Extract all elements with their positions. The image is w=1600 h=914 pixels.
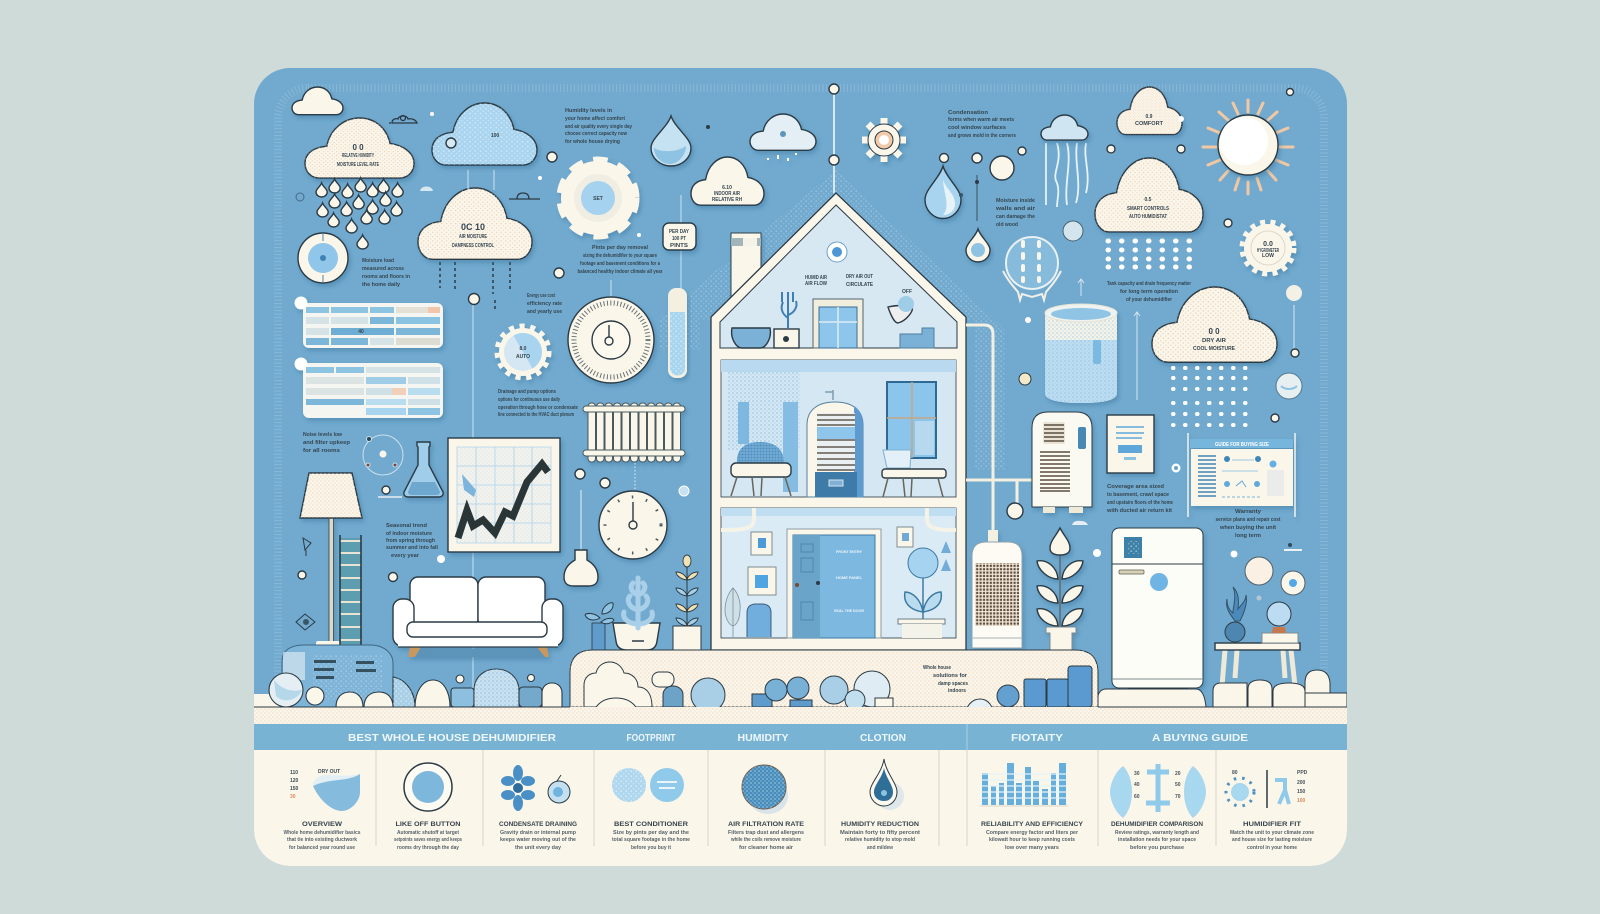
buying guide board: [1188, 433, 1295, 517]
icon: ring gauge faint: [363, 435, 403, 475]
text block: centre upper: Pints per day removal: [592, 245, 649, 251]
column: two circles: total square footage in the home: [612, 837, 690, 843]
column: bar chart: RELIABILITY AND EFFICIENCY: [981, 821, 1084, 828]
column: guide diagram: 60: [1134, 794, 1140, 800]
text block: mid left: Energy use cost: [527, 293, 555, 299]
text block: under small frame: and upstairs floors of the home: [1107, 500, 1173, 506]
ground strip with dots: [254, 707, 1347, 724]
cloud: blue with dots: 100: [491, 133, 499, 139]
column: water drop: [840, 759, 920, 851]
column: water drop: relative humidity to stop mold: [845, 837, 915, 843]
gear right with label: HYGROMETER: [1257, 248, 1279, 254]
label box small: PER DAY: [669, 229, 690, 235]
column: guide diagram: installation needs for your space: [1118, 837, 1196, 843]
attic room: [720, 205, 957, 348]
text block: above tank: Tank capacity and drain frequency matter: [1107, 281, 1191, 287]
scattered icons lower right: [1072, 521, 1305, 600]
gear outlined top centre: [862, 118, 906, 162]
text block: on cream ground: damp spaces: [938, 681, 968, 687]
ground floor room with door: FRONT ENTRY: [836, 549, 862, 554]
cloud: top right small with label: COMFORT: [1135, 121, 1163, 127]
label box small: [663, 223, 696, 250]
text block: under small frame: to basement, crawl space: [1107, 492, 1169, 498]
cloud: lower right with dots: 0 0: [1208, 327, 1220, 336]
lines and dots around clock: [575, 463, 689, 550]
panel: lower guide columns: [254, 750, 1347, 866]
column: final diagram: Match the unit to your climate zone: [1230, 830, 1314, 836]
clock wall: [599, 491, 667, 559]
small icons left column: [296, 486, 445, 630]
cloud: large middle right with dots: [1095, 158, 1203, 267]
text block: top of house right: Condensation: [948, 110, 988, 116]
pipe system to dehumidifier: [966, 325, 1032, 530]
text block: top of house right: cool window surfaces: [948, 125, 1006, 131]
cloud: rain left with label: 0 0: [352, 143, 364, 152]
gear small with label: AUTO: [516, 354, 530, 360]
cloud: centre small with label: 6.10: [722, 185, 732, 191]
cloud: central with hanging chains: [418, 188, 532, 312]
title band: [254, 724, 1347, 750]
column: guide diagram: 50: [1175, 782, 1181, 788]
gear small with label: 8.0: [520, 346, 527, 352]
buying guide board: GUIDE FOR BUYING SIZE: [1215, 442, 1270, 448]
text block: above radiator: line connected to the HVAC duct plenum: [498, 412, 574, 418]
text block: under board: Warranty: [1235, 509, 1261, 515]
column: overview: 110: [290, 770, 298, 776]
icon: lab flask: [404, 442, 443, 497]
column: overview: that tie into existing ductwork: [287, 837, 357, 843]
column: ring icon: setpoints saves energy and keeps: [394, 837, 462, 843]
text block: top of house right: and grows mold in the corners: [948, 133, 1016, 139]
text block: under small frame: with ducted air return kit: [1106, 508, 1172, 514]
column: final diagram: [1226, 770, 1314, 851]
base blobs right: [1098, 670, 1347, 707]
gear small with label: [498, 326, 549, 378]
text block: top of house right: [948, 110, 1016, 139]
text block: small right of house: can damage the: [996, 214, 1035, 220]
text block: small right of house: old wood: [996, 222, 1018, 228]
cloud: blue with dots: [432, 103, 537, 165]
column: water drop: HUMIDITY REDUCTION: [841, 821, 919, 828]
text block: small right of house: walls and air: [995, 206, 1035, 212]
text block: under board: long term: [1235, 533, 1262, 539]
column: final diagram: 80: [1232, 770, 1238, 776]
text block: beside chart: [386, 523, 439, 559]
text block: centre upper: sizing the dehumidifier to your square: [583, 253, 657, 259]
text block: under board: [1216, 509, 1281, 539]
column: final diagram: 200: [1297, 780, 1306, 786]
text block: beside dial: Moisture load: [362, 258, 394, 264]
column: ring icon: LIKE OFF BUTTON: [396, 821, 461, 828]
text block: above radiator: [498, 389, 578, 418]
dots and balls right: [1019, 285, 1302, 422]
column: final diagram: and house size for lasting moisture: [1232, 837, 1312, 843]
text block: beside dial: measured across: [362, 266, 404, 272]
column: two circles: before you buy it: [631, 845, 671, 851]
column: two circles: [612, 768, 690, 851]
column: guide diagram: DEHUMIDIFIER COMPARISON: [1111, 821, 1203, 828]
text block: top left notes: and air quality every single day: [565, 124, 632, 130]
text block: top left notes: your home affect comfort: [565, 116, 625, 122]
text block: under small frame: [1106, 484, 1173, 514]
column: overview: OVERVIEW: [302, 821, 343, 828]
plant: white leaves: [1037, 528, 1083, 650]
cloud: top right small with label: [1117, 87, 1182, 135]
text block: above tank: [1107, 281, 1191, 303]
label box small: 100 PT: [672, 236, 686, 242]
table: comparison one: [294, 296, 443, 348]
column: ring icon: [394, 763, 462, 851]
column: guide diagram: 40: [1134, 782, 1140, 788]
column: bar chart: Compare energy factor and liters per: [986, 830, 1078, 836]
icon: test tube: [668, 288, 687, 378]
column: flower and ball: CONDENSATE DRAINING: [499, 821, 577, 828]
cloud: small with wavy rain: [1041, 115, 1088, 207]
attic room: HUMID AIR: [805, 275, 827, 281]
plant: potted coral: [613, 578, 660, 650]
dial: circular meter left: [298, 233, 348, 283]
icon: sun: [1203, 100, 1293, 194]
ground floor room with door: [721, 508, 956, 638]
cloud: centre small with label: [691, 157, 764, 205]
water tank cylinder: [1045, 304, 1117, 403]
text block: top left notes: choose correct capacity now: [565, 131, 627, 137]
gear large with blue hub: SET: [593, 196, 603, 202]
sofa: [393, 577, 563, 657]
attic room: AIR FLOW: [805, 281, 827, 287]
text block: under small frame: Coverage area sized: [1107, 484, 1164, 490]
column: flower and ball: the unit every day: [515, 845, 561, 851]
house: whole cutaway: [711, 193, 966, 650]
cloud: central with hanging chains: DAMPNESS CONTROL: [452, 243, 494, 249]
table with vase and globe: [1215, 587, 1300, 686]
ground floor room with door: SEAL THE DOOR: [834, 608, 864, 613]
column: guide diagram: 70: [1175, 794, 1181, 800]
middle room with dehumidifier: [721, 360, 956, 497]
cloud: small blue-white top: [750, 114, 816, 161]
text block: beside dial: rooms and floors in: [362, 274, 410, 280]
cloud: large middle right with dots: AUTO HUMIDISTAT: [1129, 214, 1167, 220]
text block: top left notes: for whole house drying: [565, 139, 620, 145]
cloud: large middle right with dots: SMART CONTROLS: [1127, 206, 1170, 212]
column: water drop: and mildew: [867, 845, 893, 851]
text block: beside chart: Seasonal trend: [386, 523, 427, 529]
title band: A BUYING GUIDE: [1152, 732, 1248, 744]
text block: beside chart: every year: [391, 553, 419, 559]
column: overview: 150: [290, 786, 299, 792]
text block: beside dial: [362, 258, 410, 288]
column: final diagram: PPD: [1297, 770, 1308, 776]
cloud: centre small with label: INDOOR AIR: [714, 191, 740, 197]
column: final diagram: 150: [1297, 789, 1306, 795]
icon: floor lamp: [300, 473, 362, 646]
text block: top left notes: [565, 108, 632, 145]
cloud: small top left: [292, 87, 343, 115]
attic room: DRY AIR OUT: [846, 274, 873, 280]
text block: centre upper: footage and basement conditions for a: [580, 261, 660, 267]
cloud: rain left with label: [305, 118, 414, 178]
column: water drop: Maintain forty to fifty percent: [840, 830, 920, 836]
cloud: rain left with label: RELATIVE HUMIDITY: [342, 153, 374, 159]
base blobs inside cream ground: [584, 662, 1092, 722]
text block: above radiator: operation through hose or condensate: [498, 405, 578, 411]
cloud: lower right with dots: COOL MOISTURE: [1193, 346, 1236, 352]
text block: centre upper: balanced healthy indoor climate all year: [578, 269, 663, 275]
water drops right of house: [925, 88, 1294, 262]
column: guide diagram: 30: [1134, 771, 1140, 777]
text block: centre upper: [578, 245, 663, 275]
text block: on cream ground: solutions for: [933, 673, 967, 679]
panel: main illustration: [254, 68, 1347, 866]
column: guide diagram: before you purchase: [1130, 845, 1184, 851]
text block: above tank: for long term operation: [1120, 289, 1178, 295]
chimney: [731, 233, 761, 299]
connector lines and small dots left: [296, 112, 681, 720]
gear large with blue hub: [561, 161, 635, 235]
plant: leafy right: [673, 555, 701, 650]
plant: small blue: [585, 603, 614, 650]
column: textured ball: AIR FILTRATION RATE: [728, 821, 805, 828]
text block: beside chart: from spring through: [386, 538, 435, 544]
column: bar chart: low over many years: [1005, 845, 1059, 851]
column: flower and ball: [499, 765, 577, 851]
icon: falling rain drops: [316, 178, 403, 249]
fridge style dehumidifier: [1112, 528, 1203, 693]
text block: left small: and filter upkeep: [303, 440, 350, 446]
small framed notice: [1107, 415, 1154, 473]
table: comparison two: [294, 358, 443, 418]
antenna and top pins: [706, 84, 839, 193]
text block: beside dial: the home daily: [362, 282, 400, 288]
icon: radiator: [583, 403, 685, 462]
attic room: OFF: [902, 289, 912, 295]
table: comparison one: 40: [358, 329, 364, 335]
column: guide diagram: 20: [1175, 771, 1181, 777]
air purifier unit: [972, 530, 1022, 648]
cloud: lower right with dots: DRY AIR: [1202, 338, 1226, 344]
text block: above radiator: Drainage and pump options: [498, 389, 556, 395]
text block: mid left: [527, 293, 562, 315]
text block: on cream ground: Whole house: [923, 665, 951, 671]
title band: BEST WHOLE HOUSE DEHUMIDIFIER: [348, 732, 556, 744]
label box small: PINTS: [670, 243, 689, 249]
column: overview: 30: [290, 794, 296, 800]
thin arrows above tank: [1078, 279, 1140, 400]
text block: beside chart: summer and into fall: [386, 545, 439, 551]
column: guide diagram: [1110, 764, 1206, 851]
cloud: lower right with dots: [1152, 287, 1277, 425]
column: overview: DRY OUT: [318, 769, 340, 775]
gear right with label: LOW: [1262, 253, 1274, 259]
attic room: CIRCULATE: [846, 282, 874, 288]
text block: top of house right: forms when warm air meets: [948, 117, 1014, 123]
column: overview: [284, 769, 361, 851]
lump: blue device on left floor: [282, 645, 393, 707]
text block: above tank: of your dehumidifier: [1126, 297, 1172, 303]
column: flower and ball: keeps water moving out of the: [500, 837, 576, 843]
text block: left small: [303, 432, 350, 454]
cloud: large middle right with dots: 0.5: [1145, 197, 1152, 203]
cloud: top right small with label: 0.9: [1146, 114, 1153, 120]
small dot: [1172, 464, 1180, 472]
cloud: central with hanging chains: AIR MOISTURE: [459, 234, 488, 240]
gauge: large dial: [568, 297, 654, 383]
valve ball: [1007, 503, 1023, 519]
column: two circles: Size by pints per day and the: [613, 830, 689, 836]
cloud: rain left with label: MOISTURE LEVEL RATE: [337, 162, 379, 168]
text block: small right of house: Moisture inside: [996, 198, 1035, 204]
gear right with label: 0.0: [1263, 241, 1273, 248]
icon: water drop top: [651, 116, 691, 166]
column: ring icon: Automatic shutoff at target: [397, 830, 459, 836]
text block: under board: when buying the unit: [1219, 525, 1276, 531]
text block: under board: service plans and repair cost: [1216, 517, 1281, 523]
column: textured ball: for cleaner home air: [739, 845, 793, 851]
column: overview: for balanced year round use: [289, 845, 355, 851]
column: bar chart: kilowatt hour to keep running costs: [989, 837, 1075, 843]
text block: mid left: efficiency rate: [527, 301, 562, 307]
column: textured ball: while the coils remove moisture: [730, 837, 801, 843]
cloud: centre small with label: RELATIVE RH: [712, 197, 742, 203]
base blobs left: [254, 669, 562, 707]
cloud: central with hanging chains: 0C 10: [461, 222, 485, 232]
column: textured ball: Filters trap dust and allergens: [728, 830, 804, 836]
title band: FOOTPRINT: [626, 732, 676, 744]
icon: ladder: [340, 535, 361, 646]
column: final diagram: HUMIDIFIER FIT: [1243, 821, 1301, 828]
portable AC unit: [1032, 412, 1092, 513]
column: final diagram: control in your home: [1247, 845, 1297, 851]
column: textured ball: [728, 765, 805, 851]
text block: top left notes: Humidity levels in: [565, 108, 612, 114]
text block: on cream ground: indoors: [948, 688, 966, 694]
text block: beside chart: of indoor moisture: [386, 531, 432, 537]
text block: above radiator: options for continuous use daily: [498, 397, 560, 403]
icon: round bottle: [564, 550, 598, 586]
text block: small right of house: [995, 198, 1035, 228]
column: ring icon: rooms dry through the day: [397, 845, 459, 851]
ground floor room with door: HOME PANEL: [836, 575, 863, 580]
base: cream raised ground: [570, 650, 1098, 707]
icon: small cloud outline: [389, 116, 417, 123]
title band: CLOTION: [860, 732, 906, 744]
gear right with label: [1242, 222, 1294, 274]
column: guide diagram: Review ratings, warranty length and: [1115, 830, 1199, 836]
text block: mid left: and yearly use: [527, 309, 562, 315]
column: two circles: BEST CONDITIONER: [614, 821, 688, 828]
chart: framed line chart: [448, 438, 560, 552]
text block: left small: Noise levels low: [303, 432, 342, 438]
column: overview: 120: [290, 778, 299, 784]
column: final diagram: 100: [1297, 798, 1306, 804]
title band: FIOTAITY: [1011, 732, 1063, 744]
column: bar chart: [980, 763, 1084, 851]
title band: HUMIDITY: [738, 732, 788, 744]
column: overview: Whole home dehumidifier basics: [284, 830, 361, 836]
text block: left small: for all rooms: [303, 448, 340, 454]
icon: humidity coil globe: [1003, 237, 1061, 300]
column: flower and ball: Gravity drain or internal pump: [500, 830, 576, 836]
text block: on cream ground: [923, 665, 968, 694]
